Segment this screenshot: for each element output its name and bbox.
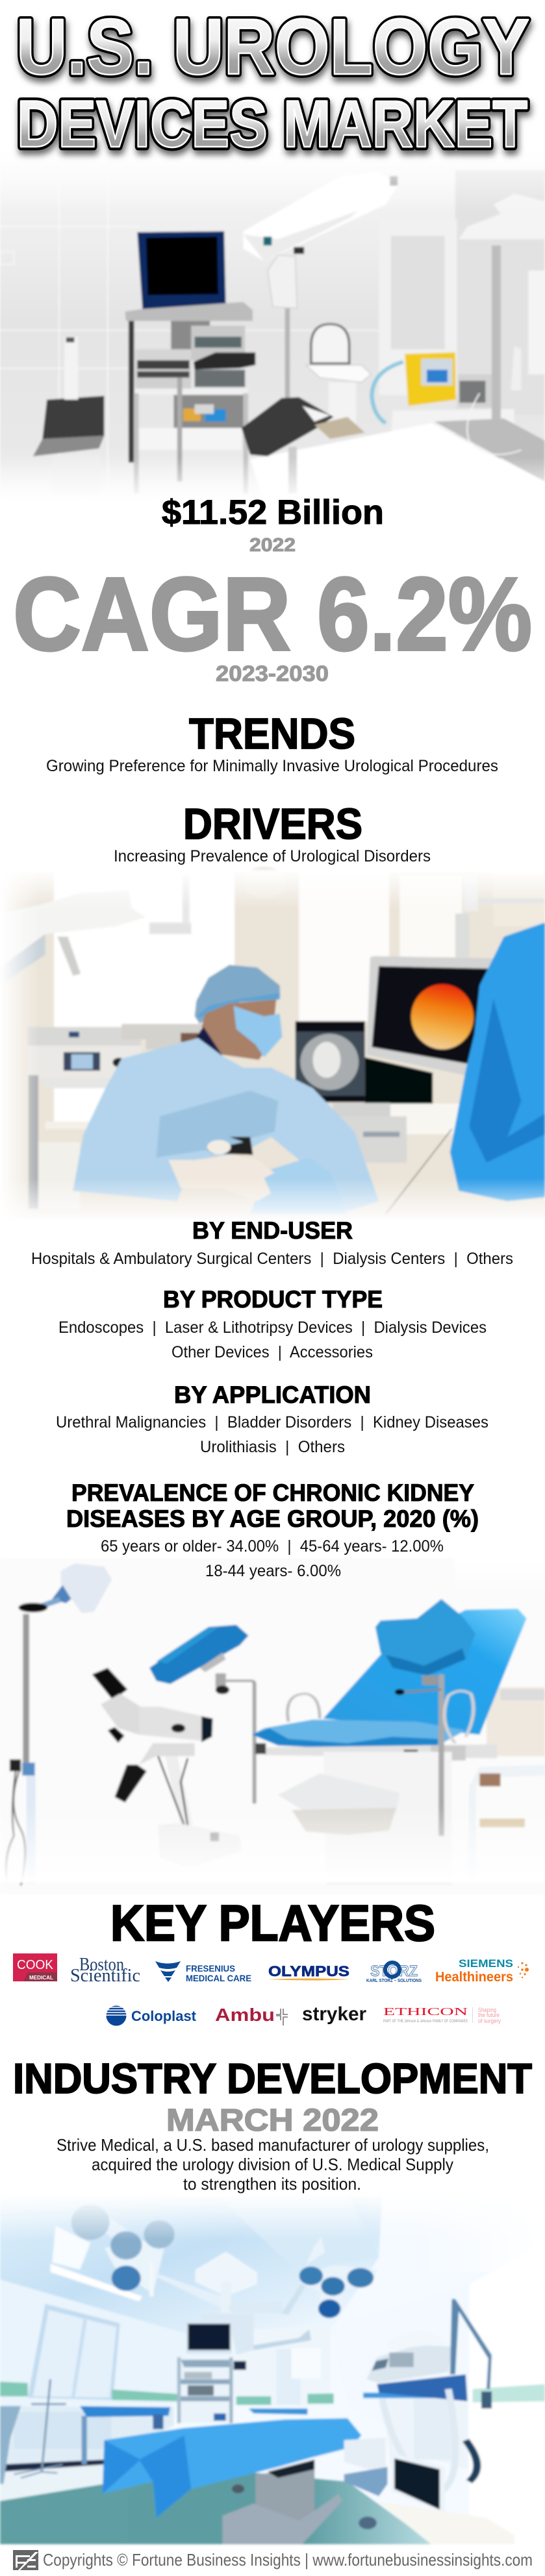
logo: Ethicon: of surgery	[478, 2018, 501, 2024]
logo: Ethicon: Shaping	[478, 2007, 496, 2013]
prevalence heading line 2: DISEASES BY AGE GROUP, 2020 (%)	[66, 1505, 479, 1532]
drivers text: Increasing Prevalence of Urological Disorders	[114, 847, 431, 865]
photo: urologist viewing endoscopy monitors	[0, 867, 545, 1224]
logo: Boston Scientific: Boston	[79, 1955, 124, 1975]
drivers heading: DRIVERS	[183, 800, 362, 848]
by product type list line 2: Other Devices | Accessories	[171, 1343, 373, 1361]
footer	[13, 2550, 533, 2570]
logo: Ethicon	[383, 2005, 501, 2024]
logo: Coloplast: Coloplast	[131, 2008, 197, 2024]
logo: Ethicon: ETHICON	[383, 2005, 468, 2018]
logo: Cook Medical	[13, 1953, 57, 1981]
logo: Stryker: stryker	[302, 2003, 366, 2025]
logo: Fresenius Medical Care: FRESENIUS	[186, 1963, 235, 1974]
logo: Cook Medical: MEDICAL	[29, 1975, 53, 1981]
photo: blue-toned operating theatre	[0, 2194, 545, 2545]
logo: Siemens Healthineers: Healthineers	[435, 1970, 513, 1985]
key players heading: KEY PLAYERS	[110, 1894, 435, 1951]
by end-user heading: BY END-USER	[192, 1217, 353, 1244]
prevalence line 1: 65 years or older- 34.00% | 45-64 years- 12.00%	[101, 1537, 444, 1555]
forecast period: 2023-2030	[216, 662, 329, 686]
logo: Karl Storz: KARL STORZ – SOLUTIONS	[366, 1977, 422, 1983]
logo: Siemens Healthineers	[435, 1957, 529, 1985]
market size value: $11.52 Billion	[162, 493, 384, 532]
development text line 3: to strengthen its position.	[183, 2174, 361, 2194]
trends heading: TRENDS	[189, 710, 355, 758]
footer logo	[13, 2550, 38, 2570]
photo: operating room in grayscale	[0, 138, 545, 504]
logo: Coloplast	[105, 2006, 197, 2025]
by application heading: BY APPLICATION	[174, 1381, 371, 1408]
by application list line 1: Urethral Malignancies | Bladder Disorders | Kidney Diseases	[56, 1413, 488, 1431]
by product type list line 1: Endoscopes | Laser & Lithotripsy Devices | Dialysis Devices	[58, 1319, 487, 1337]
logo: Olympus: OLYMPUS	[268, 1963, 349, 1979]
logo: Boston Scientific	[70, 1955, 140, 1986]
prevalence line 2: 18-44 years- 6.00%	[205, 1562, 341, 1580]
prevalence heading line 1: PREVALENCE OF CHRONIC KIDNEY	[71, 1480, 474, 1506]
logo: Ambu: Ambu	[215, 2005, 275, 2025]
by application list line 2: Urolithiasis | Others	[200, 1438, 345, 1456]
logos	[13, 1953, 529, 2025]
logo: Karl Storz: STORZ	[370, 1963, 418, 1980]
logo: Fresenius Medical Care: MEDICAL CARE	[186, 1973, 251, 1983]
photo: urology examination chair and colposcope	[0, 1558, 545, 1894]
logo: Ambu	[215, 2005, 288, 2025]
industry development heading: INDUSTRY DEVELOPMENT	[13, 2055, 532, 2102]
trends text: Growing Preference for Minimally Invasive Urological Procedures	[46, 757, 498, 775]
logo: Fresenius Medical Care	[155, 1961, 251, 1983]
logo: Ethicon: PART OF THE Johnson & Johnson FAMILY OF COMPANIES	[383, 2020, 468, 2024]
development date: MARCH 2022	[166, 2103, 379, 2138]
development text line 1: Strive Medical, a U.S. based manufacturer of urology supplies,	[57, 2135, 489, 2155]
logo: Siemens Healthineers: SIEMENS	[459, 1957, 513, 1970]
development text line 2: acquired the urology division of U.S. Medical Supply	[92, 2155, 453, 2174]
logo: Ethicon: the future	[478, 2012, 500, 2018]
logo: Cook Medical: COOK	[17, 1958, 54, 1972]
market size year: 2022	[249, 535, 296, 556]
logo: Boston Scientific: Scientific	[70, 1966, 140, 1986]
by product type heading: BY PRODUCT TYPE	[163, 1286, 383, 1313]
title	[16, 3, 529, 161]
by end-user list: Hospitals & Ambulatory Surgical Centers | Dialysis Centers | Others	[31, 1250, 513, 1268]
